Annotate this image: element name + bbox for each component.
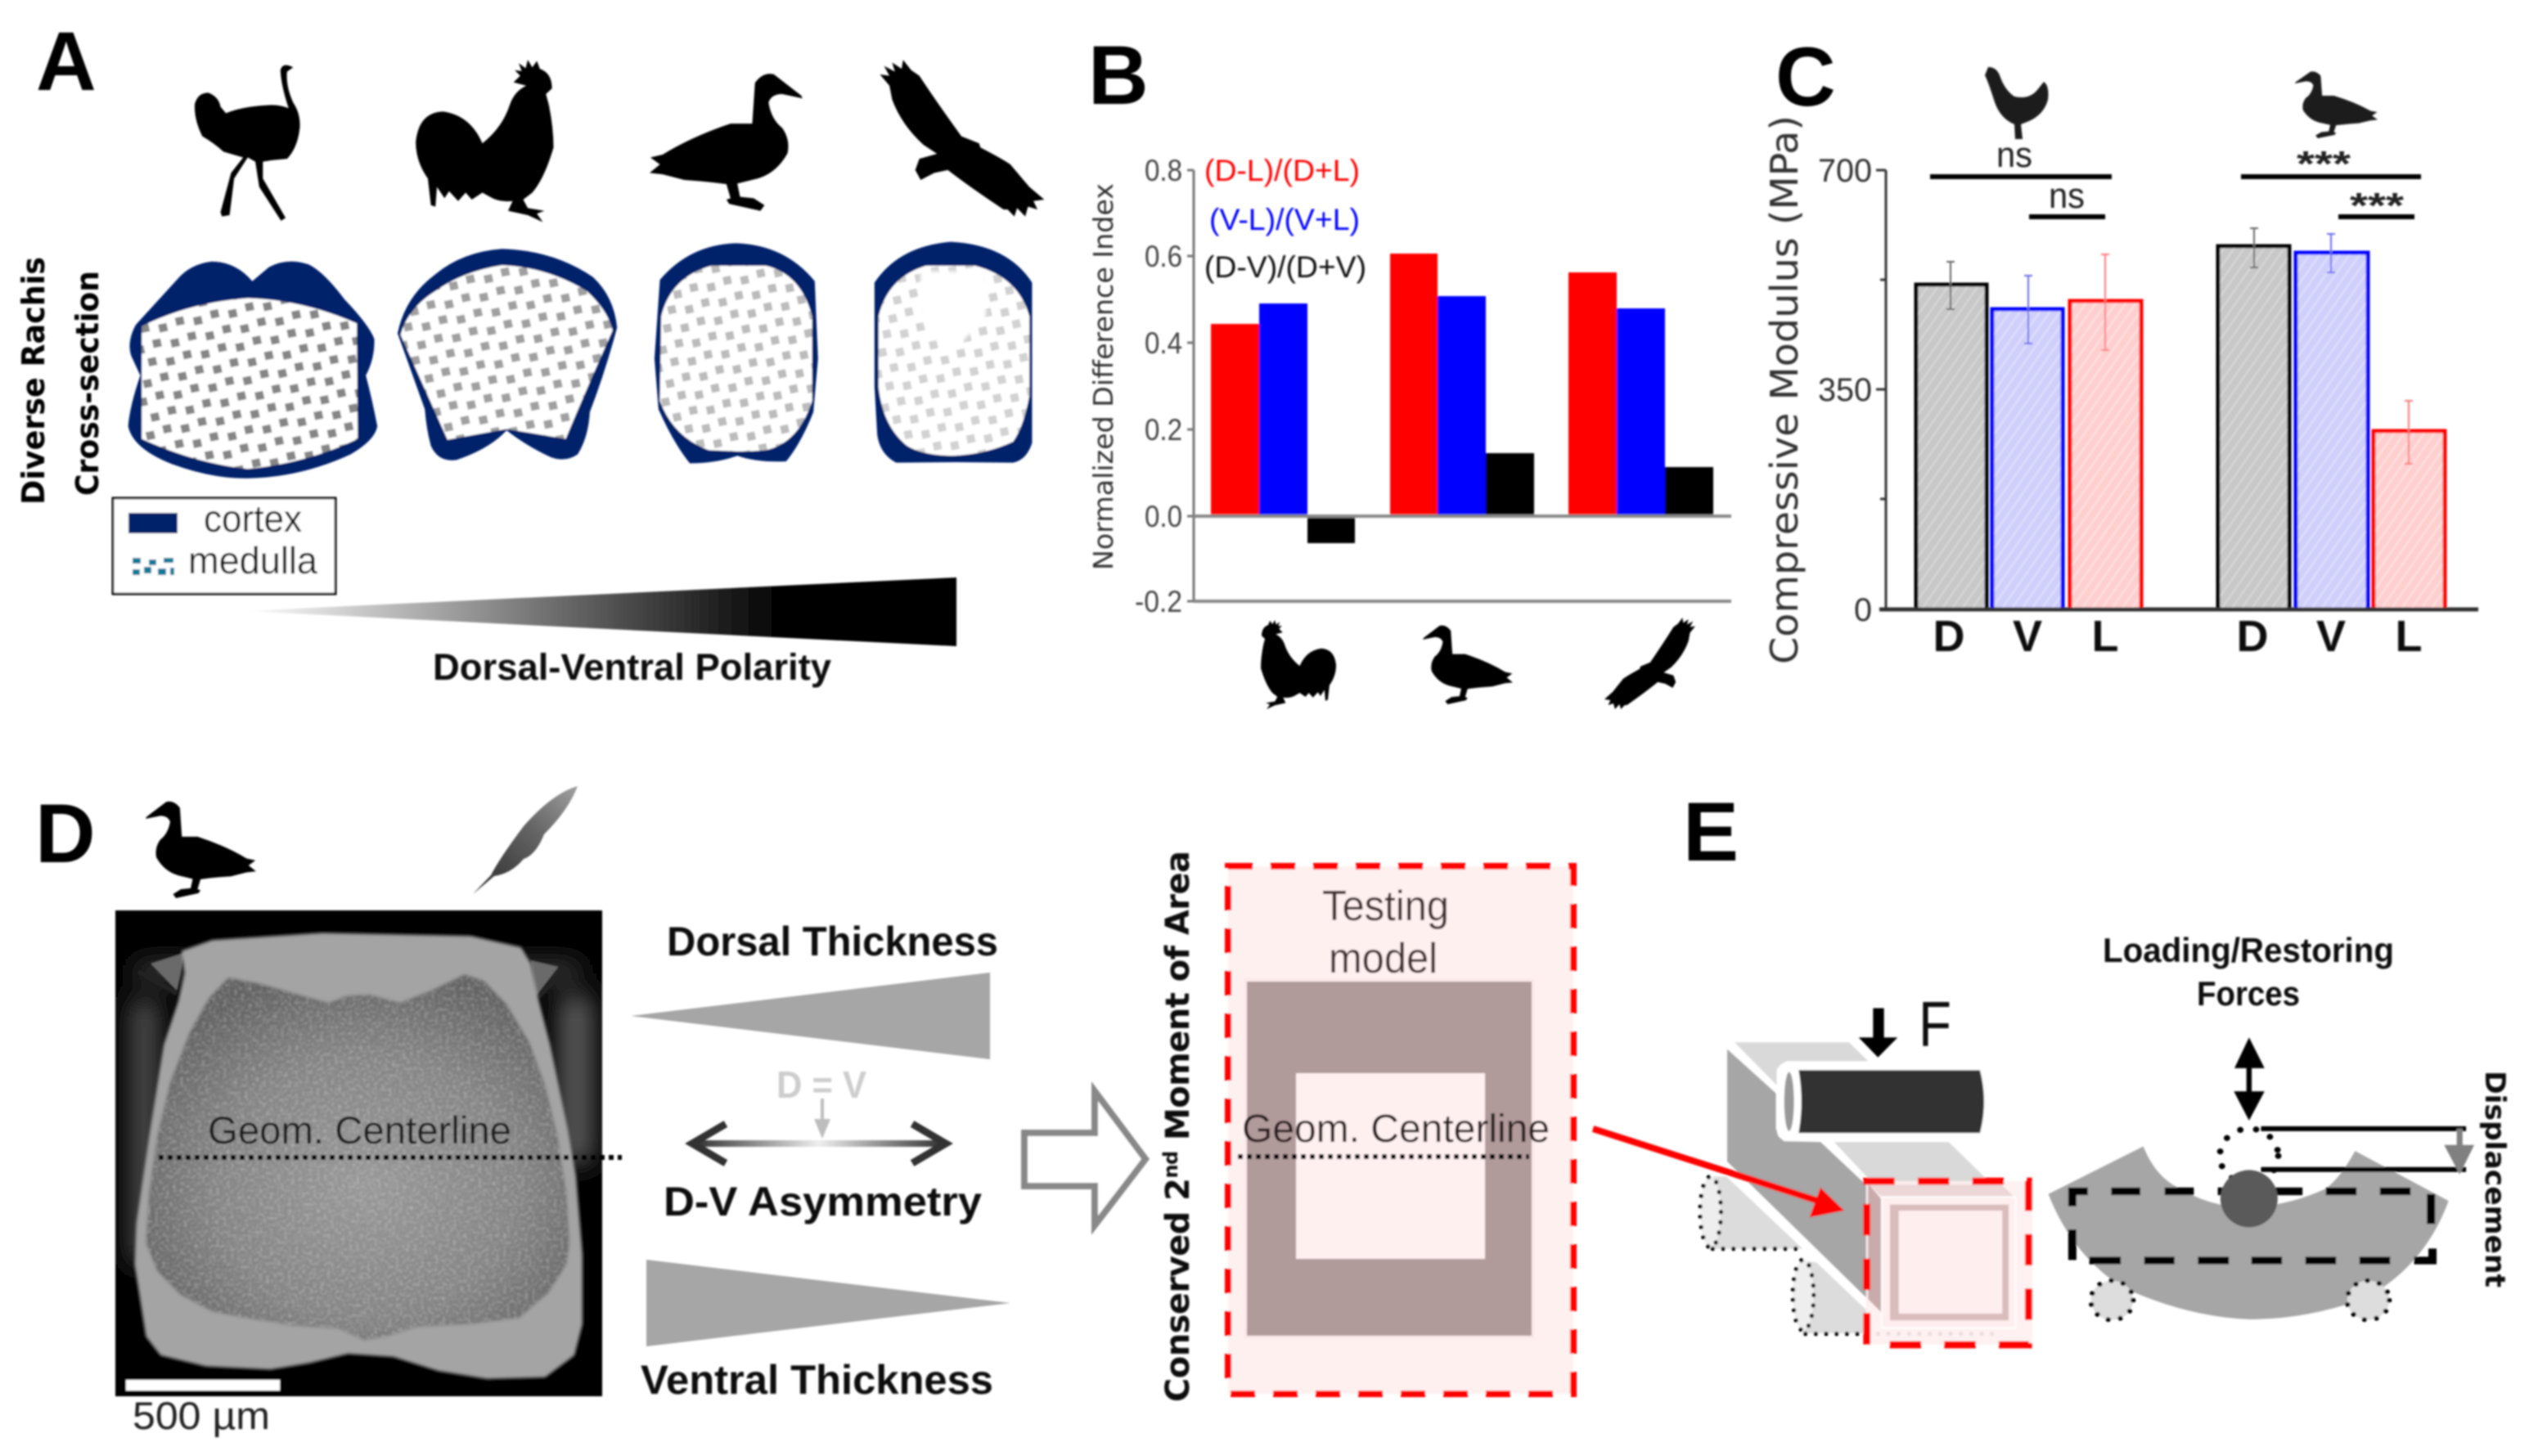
legend: cortex and medulla: medulla: [188, 539, 317, 582]
x axis: [1879, 607, 2478, 612]
y axis and tick labels: [1818, 153, 1886, 628]
cross-section shapes: [128, 242, 1032, 479]
side label: diverse rachis cross-section: [16, 257, 106, 505]
x axis labels D V L: D: [1933, 612, 1965, 661]
heading: C: C: [1775, 30, 1836, 124]
heading: B: B: [1088, 29, 1149, 122]
error bars: [1946, 228, 2413, 464]
heading: D: D: [35, 787, 96, 880]
ventral wedge: [646, 1260, 1010, 1346]
polarity label: Dorsal-Ventral Polarity: [433, 646, 831, 688]
x axis labels D V L: V: [2316, 612, 2346, 661]
dorsal thickness label: Dorsal Thickness: [667, 919, 998, 964]
side label: diverse rachis cross-section: Cross-section: [70, 271, 106, 496]
loading forces label: [2103, 931, 2394, 1013]
scale label: 500 µm: [133, 1394, 270, 1437]
species icons under chart: [1261, 618, 1695, 709]
centerline label: Geom. Centerline: [208, 1108, 511, 1152]
ventral thickness label: Ventral Thickness: [641, 1357, 993, 1403]
x axis labels D V L: V: [2013, 612, 2042, 661]
three-point test rig: [1593, 1009, 2032, 1345]
y axis and ticks: [1135, 154, 1194, 618]
polarity wedge: [244, 577, 956, 646]
y axis and tick labels: 0: [1854, 592, 1872, 628]
panel A: rachis cross-sections: [16, 15, 1044, 688]
significance brackets: ns: [1996, 135, 2032, 175]
x axis labels D V L: L: [2091, 612, 2119, 661]
centerline label on model: Geom. Centerline: [1242, 1108, 1550, 1151]
dotted centerline on model: [1238, 1154, 1529, 1159]
loading forces label: Loading/Restoring: [2103, 931, 2394, 969]
bending diagram: [2049, 1129, 2466, 1320]
arrow: hollow block arrow: [1024, 1091, 1145, 1225]
double arrow: asymmetry: [692, 1124, 946, 1163]
arrow: loading double arrow: [2234, 1037, 2265, 1121]
asymmetry label: D-V Asymmetry: [664, 1179, 982, 1225]
arrow: displacement: [2444, 1129, 2474, 1175]
dorsal wedge: [631, 973, 990, 1059]
testing model panel: [1228, 866, 1573, 1394]
y axis title: Compressive Modulus (MPa): [1762, 115, 1807, 664]
legend ratios: (D-V)/(D+V): [1204, 250, 1366, 284]
significance brackets: ***: [2297, 144, 2351, 184]
baselines: [1194, 516, 1731, 601]
x axis labels D V L: [1933, 612, 2422, 661]
rotated label: second moment of area: Conserved 2: [1159, 1178, 1197, 1402]
side label: diverse rachis cross-section: Diverse Rachis: [16, 257, 52, 505]
icon: duck: [146, 802, 256, 898]
scale bar: [126, 1380, 280, 1391]
testing model label: Testing: [1322, 883, 1449, 930]
y axis and ticks: 0.6: [1145, 240, 1182, 273]
loading roller: [1777, 1062, 1990, 1141]
displacement label: Displacement: [2478, 1071, 2511, 1287]
rollers below specimen: [1700, 1176, 1999, 1334]
D = V label: D = V: [776, 1063, 866, 1106]
significance brackets: [1930, 135, 2421, 226]
legend: cortex and medulla: [113, 497, 335, 594]
legend ratios: (D-L)/(D+L): [1204, 154, 1360, 187]
y axis and ticks: 0.4: [1145, 326, 1182, 360]
panel C: compressive modulus chart: [1762, 30, 2478, 664]
bird silhouettes row: [195, 60, 1044, 222]
micrograph of rachis section: [115, 910, 602, 1396]
testing model label: [1322, 883, 1449, 982]
dotted centerline: [159, 1155, 622, 1160]
testing model label: model: [1329, 935, 1438, 982]
arrow: red connector: [1593, 1129, 1844, 1217]
bars: chicken: [1916, 285, 2141, 609]
force label F: F: [1919, 988, 1951, 1060]
icon: feather: [473, 786, 578, 894]
force arrow: [1859, 1009, 1897, 1058]
red dashed specimen zoom: [1863, 1181, 2032, 1345]
y axis and ticks: 0.2: [1145, 413, 1182, 447]
x axis labels D V L: L: [2396, 612, 2422, 661]
y axis and ticks: 0.0: [1145, 500, 1182, 533]
y axis and ticks: -0.2: [1135, 585, 1182, 618]
loading forces label: Forces: [2197, 974, 2300, 1013]
specimen block: [1727, 1042, 2003, 1313]
panel B: normalized difference index chart: [1087, 29, 1731, 709]
bars: duck: [2218, 246, 2445, 609]
significance brackets: ns: [2049, 176, 2085, 216]
panel E: mechanical test schematic: [1593, 785, 2511, 1345]
y axis and tick labels: 350: [1818, 372, 1872, 408]
y axis and ticks: 0.8: [1145, 154, 1182, 187]
panel D: micrograph and D-V asymmetry: [35, 786, 1573, 1437]
bars: [1211, 254, 1713, 543]
rotated label: second moment of area: Moment of Area: [1159, 851, 1197, 1151]
x axis labels D V L: D: [2237, 612, 2268, 661]
y axis and tick labels: 700: [1818, 153, 1872, 189]
rotated label: second moment of area: nd: [1159, 1151, 1182, 1179]
species icons: [1985, 67, 2378, 139]
y axis title: Normalized Difference Index: [1087, 183, 1119, 570]
significance brackets: ***: [2350, 186, 2405, 226]
heading: A: A: [36, 15, 97, 108]
heading: E: E: [1683, 785, 1739, 879]
arrow: D = V pointer: [814, 1099, 830, 1139]
legend ratios: [1204, 154, 1366, 284]
legend: cortex and medulla: cortex: [204, 497, 302, 540]
legend ratios: (V-L)/(V+L): [1209, 203, 1360, 236]
